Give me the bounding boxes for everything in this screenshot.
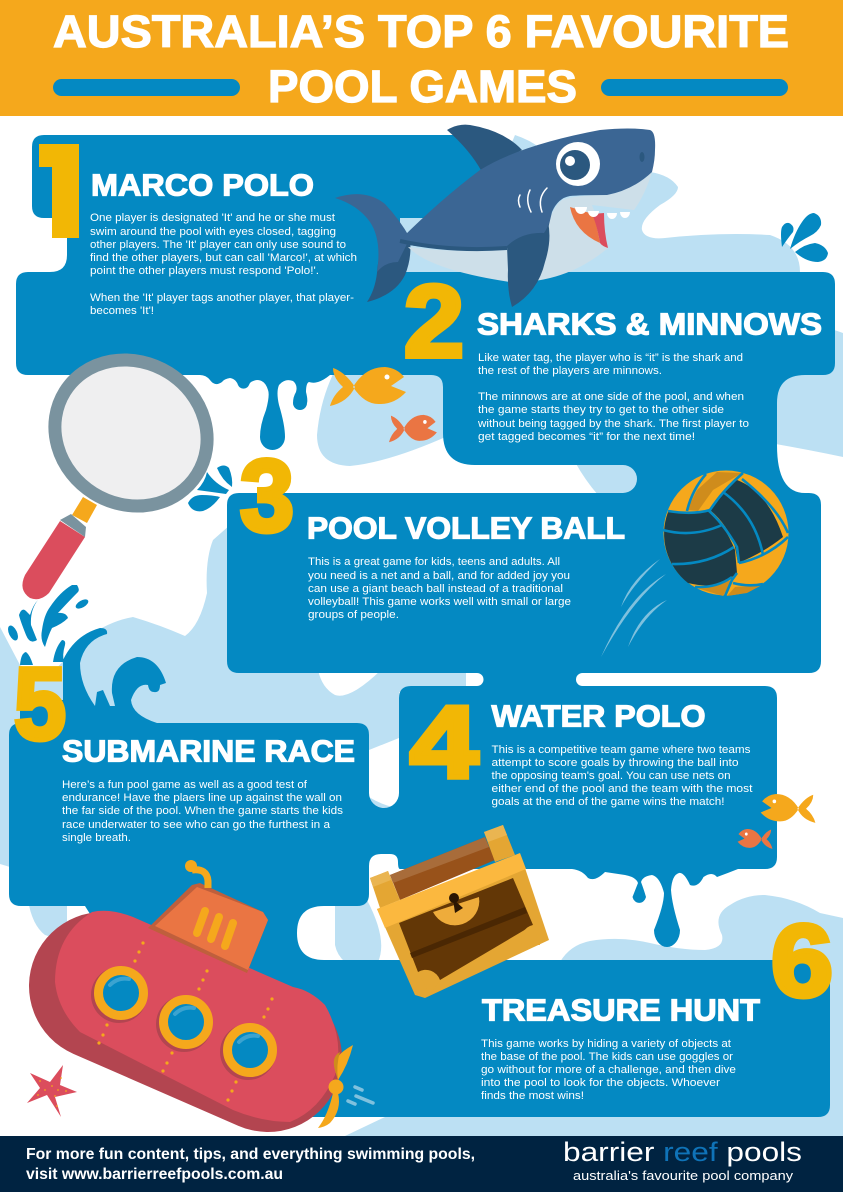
icon: starfish bbox=[27, 1065, 77, 1117]
body text bbox=[62, 779, 343, 844]
icon: volleyball bbox=[663, 470, 788, 596]
panel: 5 submarine race bbox=[9, 647, 369, 906]
body text bbox=[308, 556, 571, 621]
body text: get tagged becomes “it” for the next time! bbox=[478, 431, 695, 443]
body text: goals at the end of the game wins the match! bbox=[492, 796, 724, 808]
body text: either end of the pool and the team with the most bbox=[492, 783, 753, 795]
body text: finds the most wins! bbox=[481, 1090, 584, 1102]
body text: volleyball! This game works well with small or large bbox=[308, 596, 571, 608]
body text bbox=[90, 212, 357, 317]
body text: attempt to score goals by throwing the ball into bbox=[492, 757, 738, 769]
body text: This game works by hiding a variety of objects at bbox=[481, 1038, 732, 1050]
heading: TREASURE HUNT bbox=[482, 992, 760, 1028]
footer call to action: visit www.barrierreefpools.com.au bbox=[26, 1166, 283, 1183]
panel: 6 treasure hunt bbox=[297, 904, 833, 1117]
splash near panel 2 bbox=[781, 213, 828, 262]
number 5: 5 bbox=[14, 647, 66, 761]
icon: orange fish right bbox=[761, 794, 815, 823]
body text: endurance! Have the plaers line up against the wall on bbox=[62, 792, 342, 804]
icon: red fish bbox=[389, 415, 437, 442]
body text: other players. The 'It' player can only use sound to bbox=[90, 239, 346, 251]
number 1: 1 bbox=[16, 113, 96, 260]
body text: single breath. bbox=[62, 832, 131, 844]
body text: you need is a net and a ball, and for added joy you bbox=[308, 570, 570, 582]
body text: This is a great game for kids, teens and adults. All bbox=[308, 556, 560, 568]
body text: swim around the pool with eyes closed, tagging bbox=[90, 226, 336, 238]
panel: 2 sharks and minnows bbox=[404, 264, 835, 465]
panel: 3 pool volley ball bbox=[227, 439, 821, 673]
splash near number 3 bbox=[188, 466, 232, 511]
right title bar bbox=[601, 79, 788, 96]
heading: POOL VOLLEY BALL bbox=[307, 510, 625, 546]
footer logo: barrier reef pools bbox=[563, 1137, 802, 1167]
body text: When the 'It' player tags another player, that player- bbox=[90, 292, 354, 304]
speed lines behind volleyball bbox=[601, 559, 667, 657]
body text: the opposing team's goal. You can use nets on bbox=[492, 770, 730, 782]
body text: without being tagged by the shark. The first player to bbox=[477, 418, 749, 430]
heading: SUBMARINE RACE bbox=[62, 734, 355, 768]
icon: treasure chest bbox=[370, 825, 549, 998]
footer logo bbox=[563, 1137, 802, 1183]
body text: The minnows are at one side of the pool, and when bbox=[478, 391, 744, 403]
icon: shark bbox=[335, 125, 655, 307]
number 6: 6 bbox=[771, 904, 833, 1018]
heading: SHARKS & MINNOWS bbox=[477, 306, 822, 342]
title line 1: AUSTRALIA’S TOP 6 FAVOURITE bbox=[53, 6, 789, 57]
body text: groups of people. bbox=[308, 609, 399, 621]
panel: 1 marco polo bbox=[39, 144, 356, 314]
footer bbox=[0, 1136, 843, 1192]
splash and wave above panel 5 bbox=[6, 585, 166, 723]
body text: the base of the pool. The kids can use goggles or bbox=[481, 1051, 733, 1063]
body text: can use a giant beach ball instead of a traditional bbox=[308, 583, 563, 595]
footer call to action: For more fun content, tips, and everything swimming pools, bbox=[26, 1146, 475, 1163]
icon: red fish right bbox=[738, 829, 772, 849]
body text: the far side of the pool. When the game starts the kids bbox=[62, 805, 343, 817]
body text: race underwater to see who can go the furthest in a bbox=[62, 819, 331, 831]
body text: find the other players, but can call 'Marco!', at which bbox=[90, 252, 357, 264]
body text: the game starts they try to get to the other side bbox=[478, 404, 724, 416]
icon: orange fish bbox=[330, 367, 406, 406]
left title bar bbox=[53, 79, 240, 96]
number 4: 4 bbox=[410, 686, 478, 800]
icon: magnifying glass bbox=[22, 331, 235, 599]
body text bbox=[492, 744, 753, 808]
panel: 4 water polo bbox=[399, 686, 777, 869]
body text bbox=[481, 1038, 736, 1102]
body text: This is a competitive team game where two teams bbox=[492, 744, 751, 756]
body text bbox=[477, 352, 749, 443]
body text: becomes 'It'! bbox=[90, 305, 154, 317]
body text: into the pool to look for the objects. Whoever bbox=[481, 1077, 720, 1089]
body text: point the other players must respond 'Polo!'. bbox=[90, 265, 319, 277]
body text: One player is designated 'It' and he or she must bbox=[90, 212, 336, 224]
body text: Here’s a fun pool game as well as a good test of bbox=[62, 779, 308, 791]
title banner bbox=[0, 0, 843, 116]
white gaps in the water bbox=[318, 670, 399, 808]
footer call to action bbox=[26, 1146, 475, 1183]
heading: WATER POLO bbox=[492, 698, 706, 734]
icon: submarine bbox=[55, 860, 373, 1128]
footer logo: australia's favourite pool company bbox=[573, 1168, 794, 1183]
number 3: 3 bbox=[240, 439, 294, 553]
heading: MARCO POLO bbox=[91, 168, 314, 202]
body text: Like water tag, the player who is “it” is the shark and bbox=[478, 352, 743, 364]
body text: the rest of the players are minnows. bbox=[478, 365, 662, 377]
number 2: 2 bbox=[404, 264, 464, 378]
title line 2: POOL GAMES bbox=[268, 61, 577, 112]
body text: go without for more of a challenge, and then dive bbox=[481, 1064, 736, 1076]
